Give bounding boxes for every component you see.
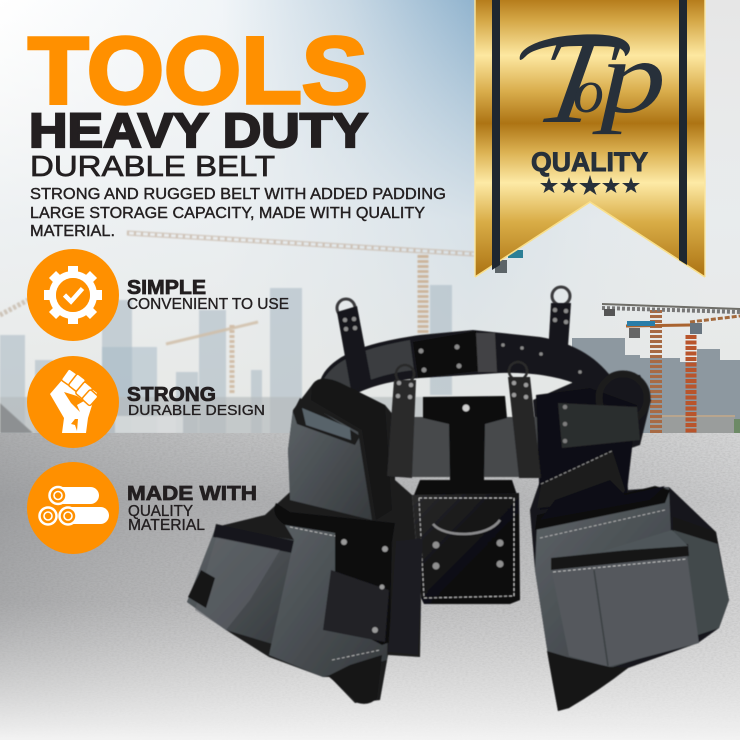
feature: strong [127, 384, 265, 419]
right upper leather pocket [536, 374, 647, 510]
icon: gear with check [27, 249, 119, 341]
feature: strong: STRONG [127, 384, 216, 406]
badge script: Top: o [573, 58, 604, 126]
rear belt [319, 330, 612, 405]
front straps with D-rings [387, 362, 541, 478]
left tool holster [323, 530, 392, 645]
heading: HEAVY DUTY: HEAVY DUTY [29, 104, 368, 158]
badge script: Top [520, 13, 666, 150]
description text: STRONG AND RUGGED BELT WITH ADDED PADDING [30, 186, 446, 203]
feature: made with [127, 483, 257, 534]
feature: made with: QUALITY [128, 503, 193, 520]
background: asphalt ground [0, 433, 740, 740]
badge label: QUALITY: QUALITY [531, 147, 648, 177]
left silhouette [187, 385, 421, 703]
badge: five stars [540, 175, 640, 195]
background: right-hand skyline and cranes [495, 250, 740, 433]
title: TOOLS: TOOLS [28, 18, 368, 124]
icon: material rolls [27, 462, 119, 554]
upper straps with D-rings [337, 287, 571, 390]
feature: made with: MATERIAL [128, 517, 205, 534]
left middle pouch [269, 503, 395, 704]
description text: MATERIAL. [30, 223, 115, 240]
left far pouch [187, 524, 295, 645]
icon: raised fist [27, 356, 119, 448]
right pouch tip [547, 651, 628, 711]
grey waist padding [395, 417, 540, 477]
right silhouette [530, 375, 729, 711]
subheading: DURABLE BELT: DURABLE BELT [30, 151, 275, 183]
badge script: Top: T [527, 13, 628, 150]
right main pouch [535, 480, 698, 668]
feature: strong: DURABLE DESIGN [128, 402, 265, 419]
badge: top quality ribbon [475, 0, 705, 277]
description text [30, 186, 446, 240]
feature: made with: MADE WITH [127, 483, 257, 505]
feature: simple: CONVENIENT TO USE [127, 296, 289, 313]
product: tool belt [187, 287, 729, 711]
feature: simple [127, 277, 289, 313]
left upper pouch [288, 378, 392, 520]
feature: simple: SIMPLE [127, 277, 206, 299]
description text: LARGE STORAGE CAPACITY, MADE WITH QUALITY [30, 205, 426, 222]
center leather panel [412, 493, 520, 604]
right far pouch [673, 517, 729, 635]
badge script: Top: p [591, 20, 666, 135]
center hanger [414, 396, 517, 495]
right front pouch [551, 530, 699, 667]
background: sky [0, 0, 740, 440]
flashlight holder [388, 538, 423, 655]
background: hazy skyline [0, 231, 474, 435]
